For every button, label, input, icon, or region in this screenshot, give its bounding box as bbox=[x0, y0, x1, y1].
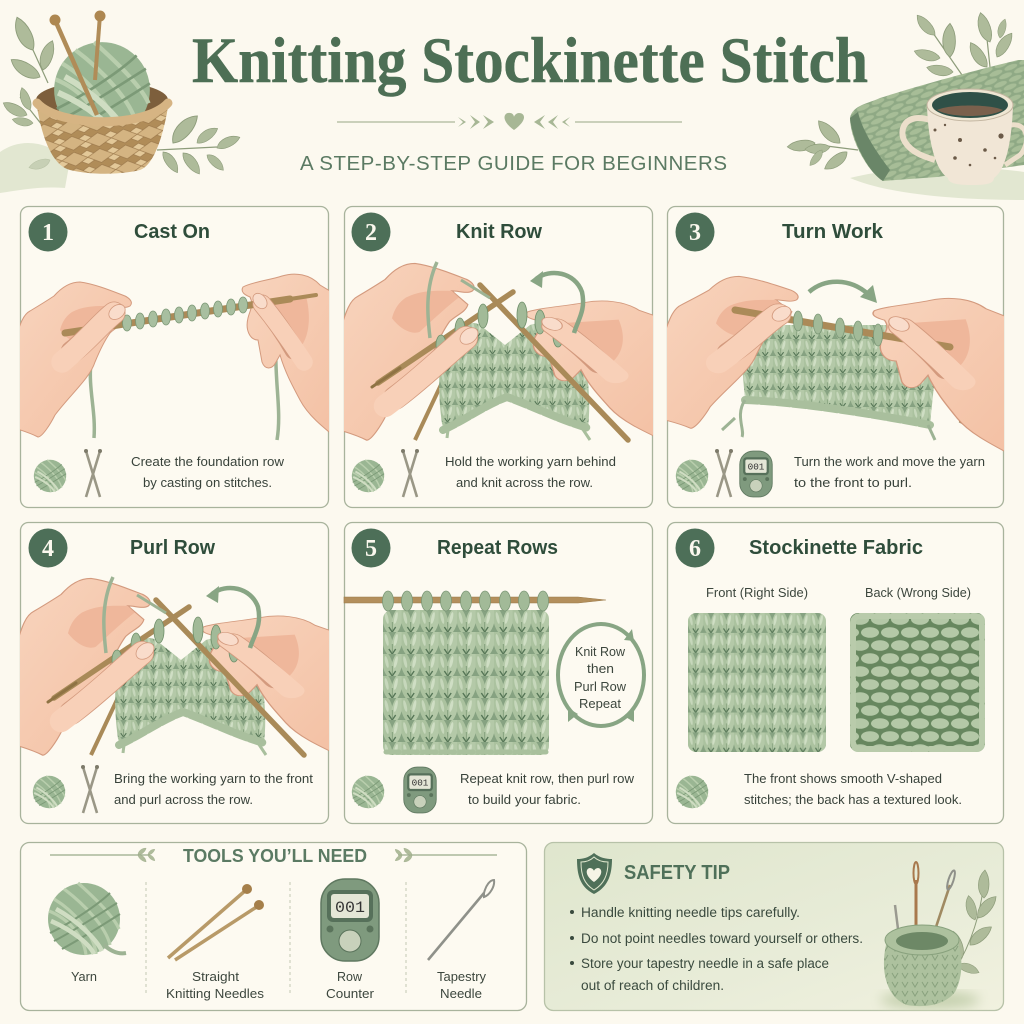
description bbox=[744, 771, 962, 807]
step number 3: 3 bbox=[689, 220, 701, 246]
panel: step 1 cast on bbox=[14, 206, 345, 508]
heading with sprigs: TOOLS YOU’LL NEED bbox=[183, 846, 367, 866]
description bbox=[460, 771, 635, 807]
fabric swatch with needle bbox=[344, 591, 606, 755]
description: to build your fabric. bbox=[468, 792, 581, 807]
illustration: knit swatch and coffee mug bbox=[787, 11, 1024, 200]
description: Create the foundation row bbox=[131, 454, 285, 469]
description bbox=[794, 454, 985, 490]
tool: tapestry needle: Needle bbox=[440, 986, 482, 1001]
icon: shield bbox=[577, 853, 612, 894]
heading with sprigs bbox=[50, 846, 497, 866]
tool: row counter: Row bbox=[337, 969, 363, 984]
tool: yarn bbox=[48, 883, 126, 984]
tool: row counter bbox=[321, 879, 379, 1001]
swatch front bbox=[688, 613, 826, 752]
swatch back bbox=[850, 613, 985, 752]
mini yarn icon bbox=[33, 776, 65, 808]
callout: repeat cycle: Repeat bbox=[579, 696, 621, 711]
step number 5 bbox=[352, 528, 390, 568]
tool: needles: Knitting Needles bbox=[166, 986, 265, 1001]
description: by casting on stitches. bbox=[143, 475, 272, 490]
description: Hold the working yarn behind bbox=[445, 454, 616, 469]
mini row counter icon bbox=[404, 767, 436, 813]
panel: step 6 stockinette fabric bbox=[668, 522, 1004, 824]
description bbox=[445, 454, 616, 490]
subtitle: A STEP-BY-STEP GUIDE FOR BEGINNERS bbox=[300, 152, 727, 175]
panel: step 4 purl row bbox=[15, 522, 351, 824]
panel: step 5 repeat rows bbox=[344, 522, 652, 824]
heading: Knit Row bbox=[456, 221, 542, 243]
bullet list: Store your tapestry needle in a safe place bbox=[581, 956, 829, 971]
panel: safety tip bbox=[544, 842, 1004, 1010]
description: Repeat knit row, then purl row bbox=[460, 771, 635, 786]
illustration: needle pot bbox=[880, 862, 999, 1009]
title: Knitting Stockinette Stitch bbox=[192, 25, 868, 97]
description: Bring the working yarn to the front bbox=[114, 771, 313, 786]
mini yarn icon bbox=[676, 776, 708, 808]
tool: needles: Straight bbox=[192, 969, 239, 984]
step number 2 bbox=[352, 212, 390, 252]
step number 1: 1 bbox=[42, 220, 54, 246]
illustration: hands casting on bbox=[14, 274, 345, 445]
illustration: hands purling bbox=[15, 577, 351, 761]
step number 4: 4 bbox=[42, 536, 54, 562]
divider ornament bbox=[337, 113, 682, 130]
tool: needles bbox=[166, 884, 265, 1001]
heading: Repeat Rows bbox=[437, 537, 558, 559]
description: to the front to purl. bbox=[794, 475, 912, 490]
callout: repeat cycle: Purl Row bbox=[574, 679, 627, 694]
step number 3 bbox=[676, 212, 714, 252]
mini yarn icon bbox=[676, 460, 708, 492]
mini needles icon bbox=[84, 449, 102, 497]
callout: repeat cycle: then bbox=[587, 661, 614, 676]
description bbox=[131, 454, 285, 490]
bullet list: Do not point needles toward yourself or others. bbox=[581, 931, 863, 946]
illustration: basket with yarn bbox=[0, 10, 242, 193]
step number 6 bbox=[676, 528, 714, 568]
bullet list bbox=[570, 905, 863, 993]
tool: row counter: Counter bbox=[326, 986, 375, 1001]
mini row counter icon bbox=[740, 451, 772, 497]
mini needles icon bbox=[401, 449, 419, 497]
description: stitches; the back has a textured look. bbox=[744, 792, 962, 807]
heading: Stockinette Fabric bbox=[749, 537, 923, 559]
label front: Front (Right Side) bbox=[706, 585, 808, 600]
step number 6: 6 bbox=[689, 536, 701, 562]
mini yarn icon bbox=[352, 776, 384, 808]
description: The front shows smooth V-shaped bbox=[744, 771, 942, 786]
heading: Cast On bbox=[134, 221, 210, 243]
step number 1 bbox=[28, 212, 68, 252]
step number 5: 5 bbox=[365, 536, 377, 562]
description: Turn the work and move the yarn bbox=[794, 454, 985, 469]
mini needles icon bbox=[81, 765, 99, 813]
bullet list: out of reach of children. bbox=[581, 978, 724, 993]
tool: tapestry needle: Tapestry bbox=[437, 969, 486, 984]
heading: SAFETY TIP bbox=[624, 862, 730, 884]
illustration: hands turning work bbox=[667, 276, 1004, 452]
heading: Turn Work bbox=[782, 221, 884, 243]
description bbox=[114, 771, 313, 807]
callout: repeat cycle: Knit Row bbox=[575, 644, 626, 659]
step number 4 bbox=[28, 528, 68, 568]
mini yarn icon bbox=[352, 460, 384, 492]
bullet list: Handle knitting needle tips carefully. bbox=[581, 905, 800, 920]
mini yarn icon bbox=[34, 460, 66, 492]
illustration: hands knitting bbox=[339, 262, 675, 446]
label back: Back (Wrong Side) bbox=[865, 585, 971, 600]
panel: step 2 knit row bbox=[339, 206, 675, 508]
panel: step 3 turn work bbox=[663, 206, 1022, 508]
tool: tapestry needle bbox=[428, 880, 494, 1001]
tool: yarn: Yarn bbox=[71, 969, 97, 984]
step number 2: 2 bbox=[365, 220, 377, 246]
panel: tools bbox=[20, 842, 526, 1010]
description: and purl across the row. bbox=[114, 792, 253, 807]
mini needles icon bbox=[715, 449, 733, 497]
callout: repeat cycle bbox=[558, 624, 644, 726]
description: and knit across the row. bbox=[456, 475, 593, 490]
heading: Purl Row bbox=[130, 537, 215, 559]
arrow: turn bbox=[809, 282, 877, 303]
